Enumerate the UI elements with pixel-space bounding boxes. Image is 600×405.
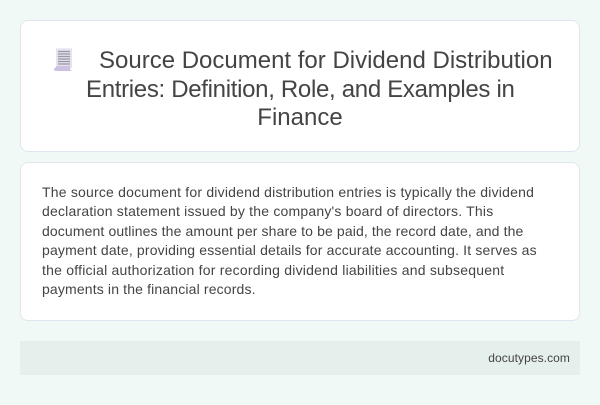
heading	[86, 47, 553, 131]
footer bar	[20, 341, 580, 375]
heading: Finance	[257, 104, 343, 131]
heading: Entries: Definition, Role, and Examples in	[86, 76, 515, 103]
text block: description: document outlines the amount per share to be paid, the record date, and the	[42, 223, 523, 239]
icon: document	[54, 48, 72, 71]
text block: description	[42, 184, 537, 297]
footer source text: docutypes.com	[488, 351, 570, 365]
text block: description: The source document for dividend distribution entries is typically the dividend	[42, 184, 534, 200]
heading: Source Document for Dividend Distribution	[99, 47, 553, 74]
text block: description: the official authorization for recording dividend liabilities and subsequent	[42, 262, 504, 278]
text block: description: payment date, providing essential details for accurate accounting. It serves as	[42, 242, 537, 258]
panel: description card	[20, 162, 580, 321]
text block: description: payments in the financial records.	[42, 281, 256, 297]
panel: title card	[20, 20, 580, 152]
text block: description: declaration statement issued by the company's board of directors. This	[42, 203, 493, 219]
